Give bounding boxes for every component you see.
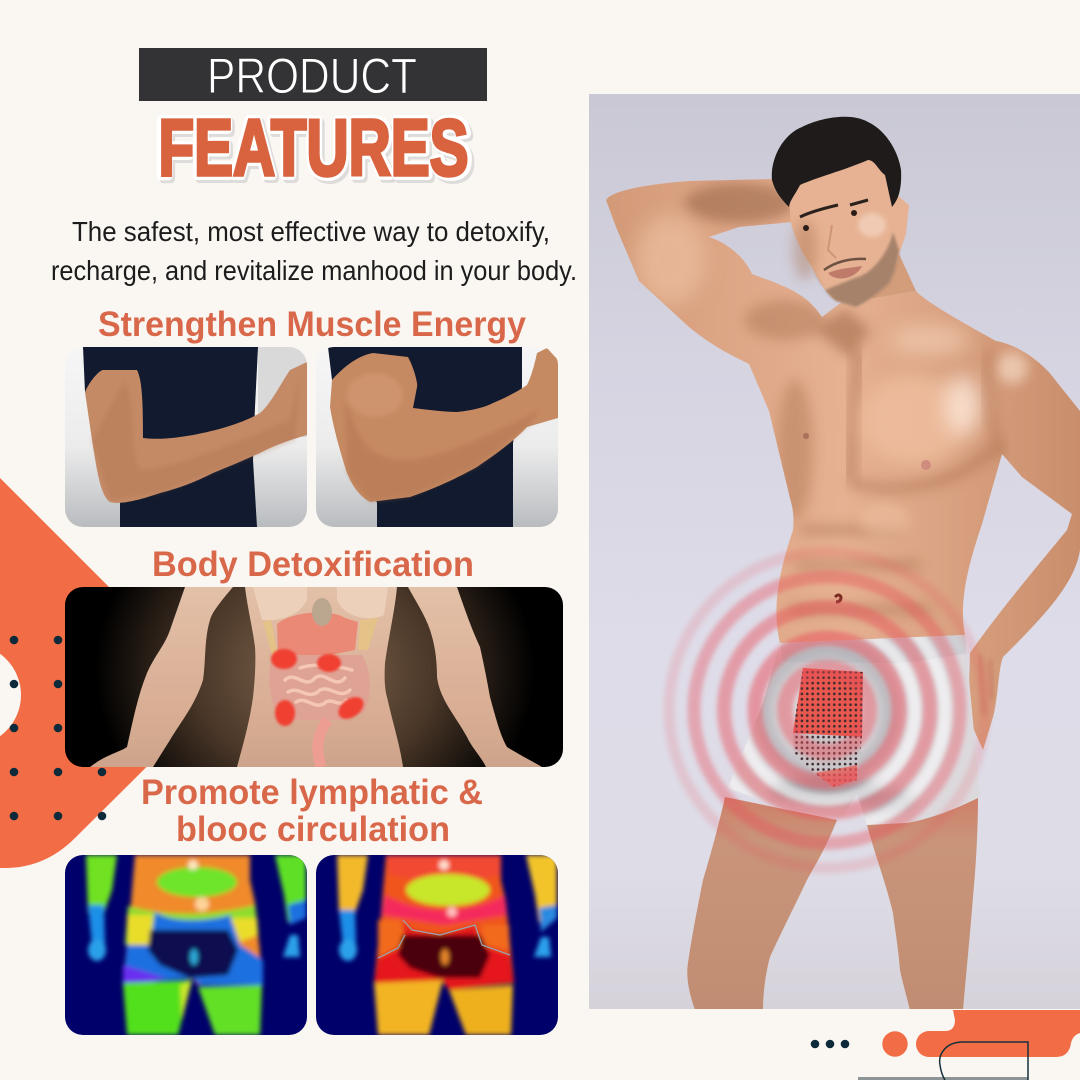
photo: relaxed arm — [65, 347, 307, 527]
figure: head — [772, 117, 916, 307]
photo: digestive system — [65, 587, 563, 767]
heading: Promote lymphatic & blooc circulation — [141, 773, 483, 849]
intro text: The safest, most effective way to detoxify, — [72, 216, 550, 247]
heading: Promote lymphatic & blooc circulation: blooc circulation — [176, 810, 450, 849]
figure: legs — [687, 797, 978, 1010]
thermal photo: after — [316, 855, 558, 1035]
heading: Strengthen Muscle Energy: Strengthen Muscle Energy — [98, 305, 527, 344]
heading: Promote lymphatic & blooc circulation: Promote lymphatic & — [141, 773, 483, 812]
title banner: PRODUCT: PRODUCT — [207, 48, 417, 104]
photo: flexed arm — [316, 347, 558, 527]
title: FEATURES: FEATURES — [156, 103, 470, 192]
decorative bottom-right shapes — [811, 1010, 1080, 1080]
title: FEATURES: FEATURES — [159, 106, 473, 195]
intro text — [51, 216, 577, 286]
decorative orange shape with dots — [0, 478, 218, 868]
heat rings — [669, 552, 985, 868]
title: FEATURES: FEATURES — [158, 103, 468, 192]
intro text: recharge, and revitalize manhood in your body. — [51, 255, 577, 286]
thermal photo: before — [65, 855, 307, 1035]
figure: torso and arms — [606, 179, 1080, 750]
figure: boxer shorts — [729, 635, 980, 825]
heading: Body Detoxification: Body Detoxification — [152, 545, 474, 584]
panel: model photo — [589, 94, 1080, 1010]
